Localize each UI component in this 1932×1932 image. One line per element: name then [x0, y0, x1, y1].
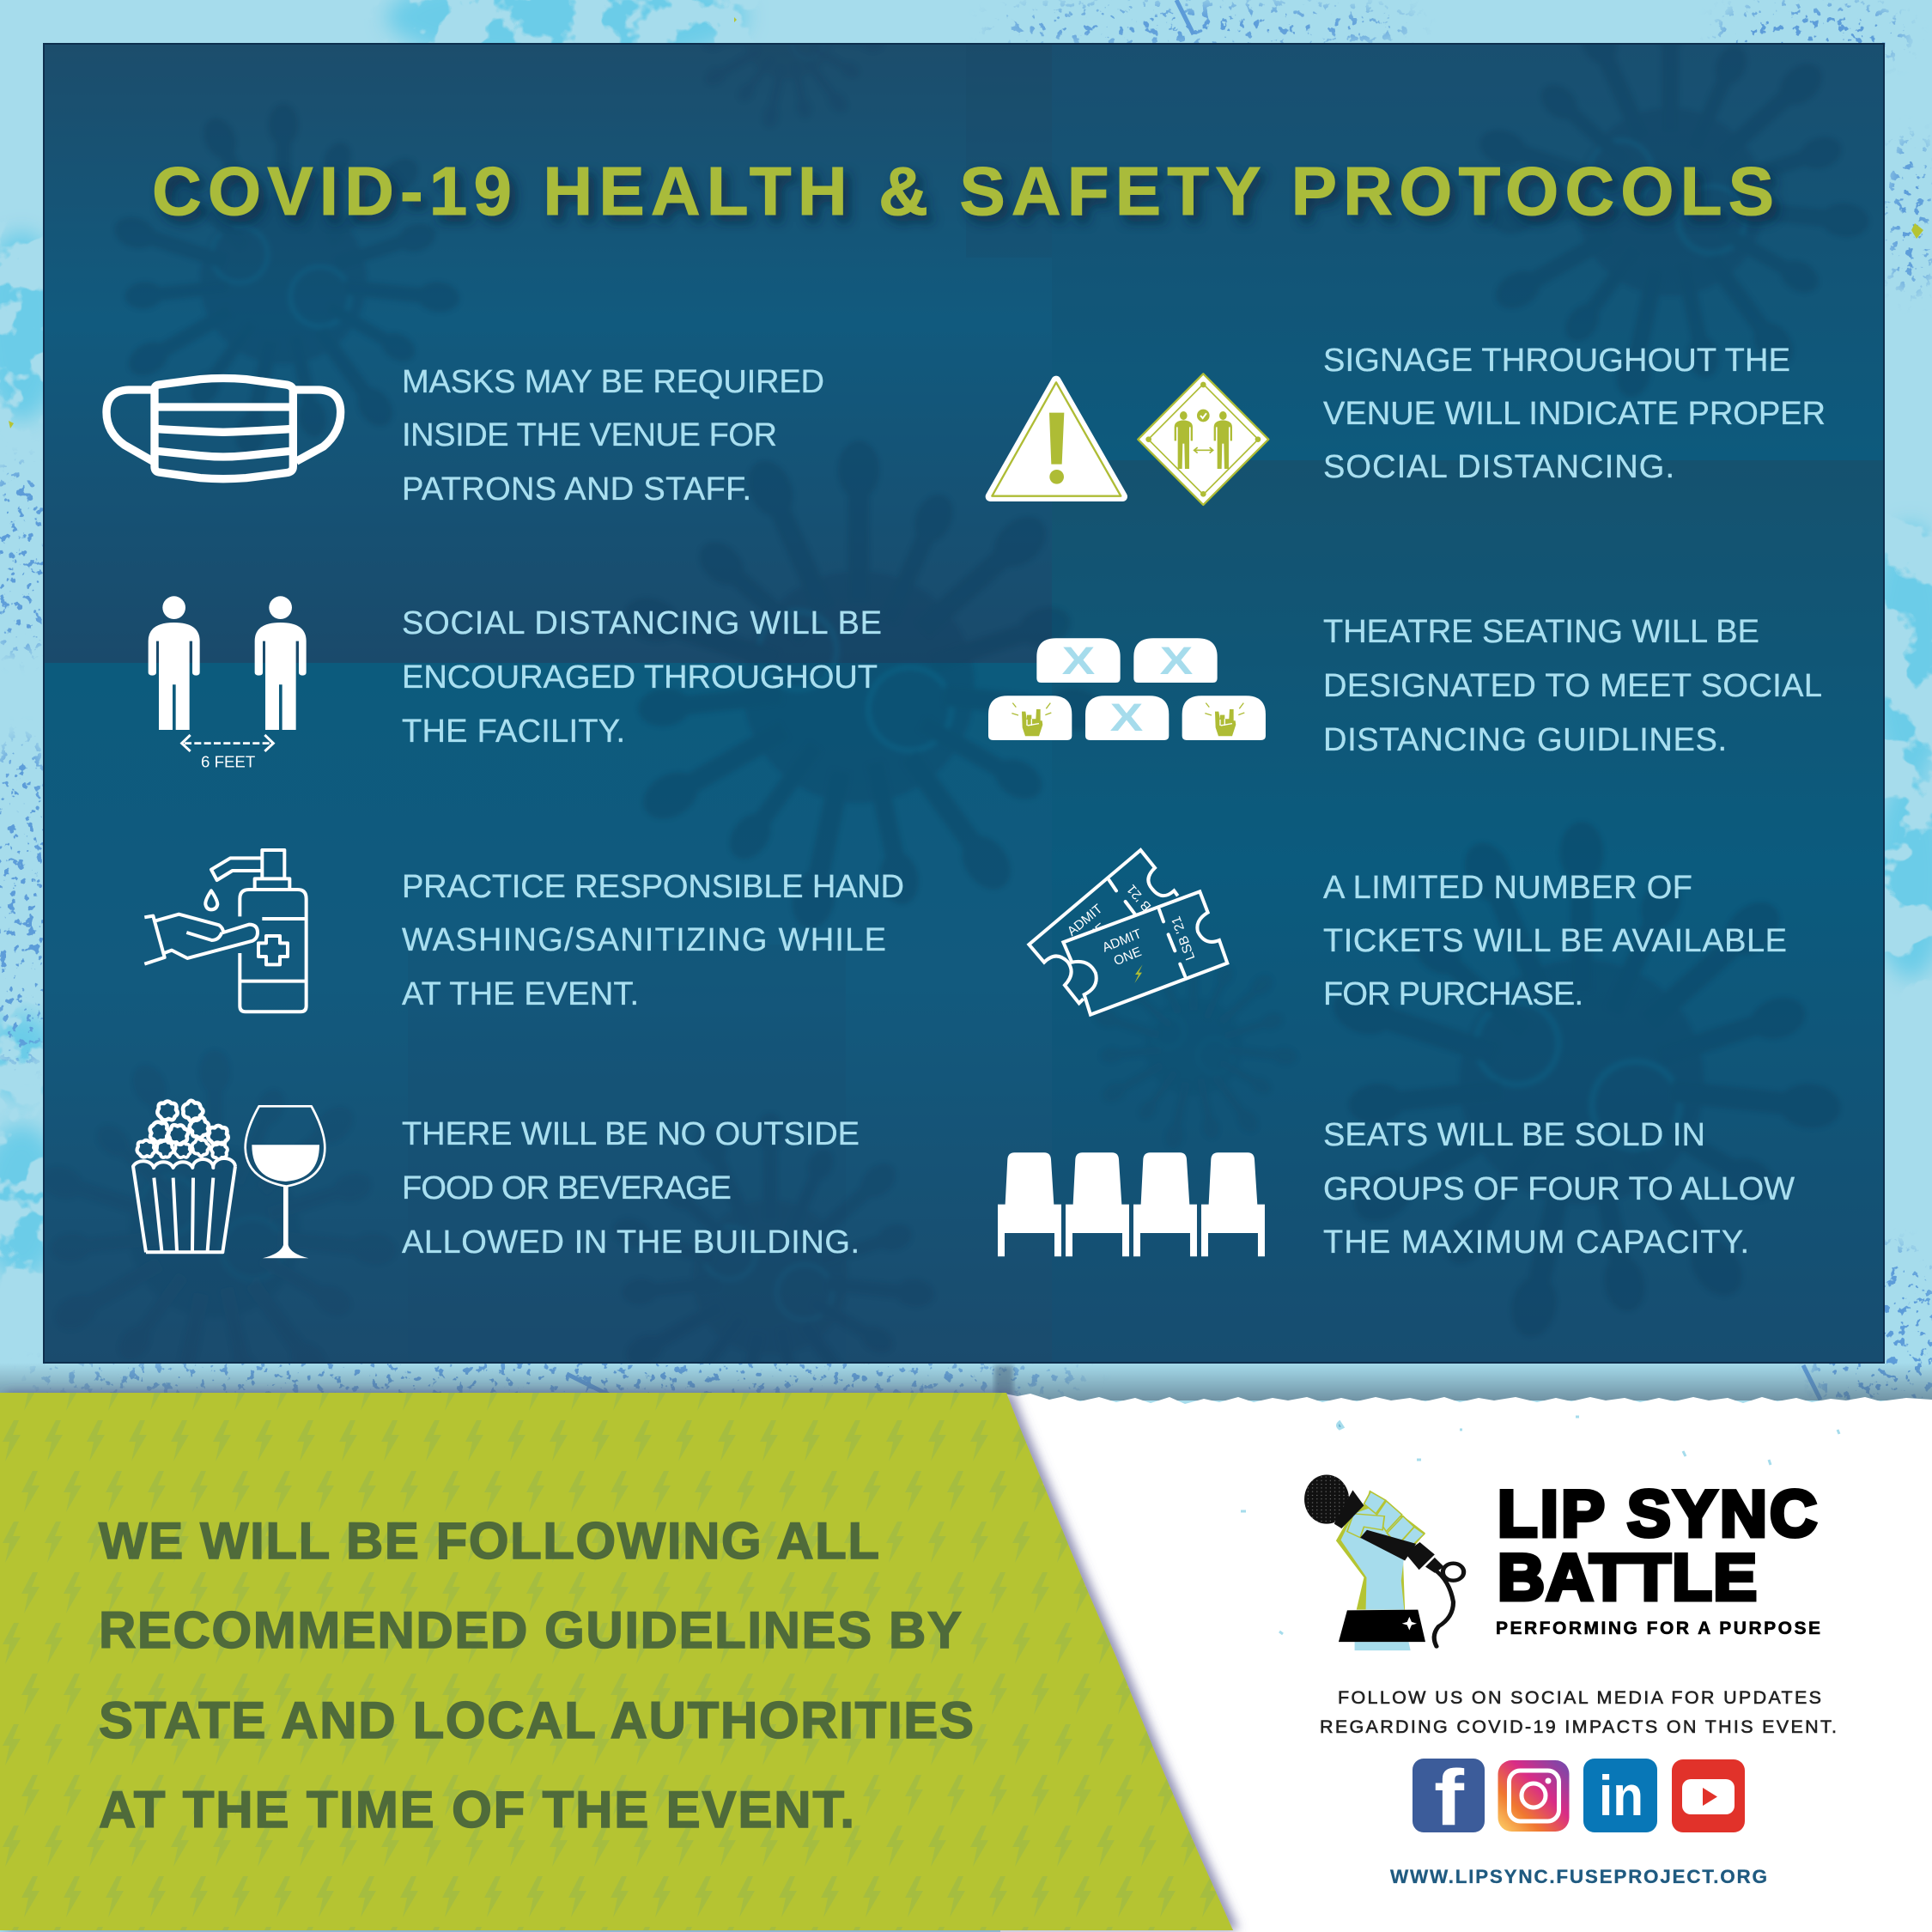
text block: social distancing: ENCOURAGED THROUGHOUT [402, 659, 878, 696]
logo wordmark [1496, 1478, 1820, 1638]
text block: theatre seating [1323, 614, 1822, 758]
icon: admit one tickets: LSB '21 [1124, 882, 1164, 926]
text block: theatre seating: DESIGNATED TO MEET SOCIAL [1323, 668, 1822, 704]
text block: no outside food: THERE WILL BE NO OUTSIDE [402, 1116, 860, 1152]
text block: signage [1323, 343, 1826, 485]
logo wordmark: LIP SYNC [1498, 1478, 1817, 1551]
text block: limited tickets: FOR PURCHASE. [1323, 976, 1583, 1012]
panel: white logo area with torn edge [1000, 1393, 1932, 1932]
icon: admit one tickets: LSB '21 [1169, 914, 1198, 962]
text block: guidelines statement: WE WILL BE FOLLOWING ALL [99, 1512, 879, 1570]
icon: admit one tickets: ONE [1078, 920, 1109, 950]
text block: limited tickets: A LIMITED NUMBER OF [1323, 870, 1692, 906]
text block: hand washing [402, 869, 904, 1012]
text block: theatre seating: THEATRE SEATING WILL BE [1323, 614, 1759, 650]
text block: masks: MASKS MAY BE REQUIRED [402, 364, 824, 400]
icon: two people six feet apart: 6 FEET [201, 752, 255, 770]
text block: social distancing: THE FACILITY. [402, 714, 625, 750]
text block: guidelines statement: RECOMMENDED GUIDELINES BY [99, 1601, 962, 1659]
icon: admit one tickets [1029, 850, 1227, 1015]
icon: lip sync battle fist and microphone logo [1304, 1474, 1464, 1650]
icon: linkedin [1583, 1759, 1657, 1832]
text block: social distancing: SOCIAL DISTANCING WILL BE [402, 605, 882, 641]
text block: masks: PATRONS AND STAFF. [402, 471, 751, 507]
icon: admit one tickets: ADMIT [1100, 927, 1145, 956]
icon: theatre seating chart: X [1160, 639, 1193, 683]
text block: theatre seating: DISTANCING GUIDLINES. [1323, 722, 1727, 758]
panel: dark blue protocols panel [37, 0, 1884, 1442]
text block: seats in groups [1323, 1117, 1795, 1261]
logo wordmark: BATTLE [1498, 1541, 1757, 1614]
icon: youtube [1672, 1759, 1745, 1832]
text block: seats in groups: GROUPS OF FOUR TO ALLOW [1323, 1171, 1795, 1207]
text block: no outside food: ALLOWED IN THE BUILDING. [402, 1224, 860, 1261]
text block: hand washing: AT THE EVENT. [402, 976, 639, 1012]
icon: facebook [1413, 1754, 1485, 1842]
icon: theatre seating chart: X [1110, 696, 1143, 739]
title: COVID-19 HEALTH & SAFETY PROTOCOLS [152, 153, 1774, 229]
icon: four theatre seats [998, 1152, 1265, 1256]
text block: signage: SIGNAGE THROUGHOUT THE [1323, 343, 1790, 379]
icon: admit one tickets: ONE [1112, 945, 1144, 969]
text block: follow us: REGARDING COVID-19 IMPACTS ON THIS EVENT. [1320, 1716, 1837, 1737]
icon: theatre seating chart: X [1062, 639, 1095, 683]
text block: no outside food: FOOD OR BEVERAGE [402, 1170, 732, 1206]
text block: seats in groups: SEATS WILL BE SOLD IN [1323, 1117, 1705, 1153]
text block: guidelines statement [99, 1512, 974, 1838]
text block: limited tickets [1323, 870, 1787, 1012]
text block: hand washing: PRACTICE RESPONSIBLE HAND [402, 869, 904, 905]
text block: masks: INSIDE THE VENUE FOR [402, 417, 777, 453]
icon: popcorn and wine glass [133, 1097, 325, 1258]
panel: green guidelines block [0, 1393, 1233, 1930]
text block: masks [402, 364, 824, 507]
text block: signage: VENUE WILL INDICATE PROPER [1323, 396, 1826, 432]
text block: follow us [1320, 1687, 1837, 1737]
icon: theatre seating chart [988, 638, 1266, 740]
text block: hand washing: WASHING/SANITIZING WHILE [402, 922, 886, 958]
text block: no outside food [402, 1116, 860, 1261]
text block: signage: SOCIAL DISTANCING. [1323, 449, 1674, 485]
text block: social distancing [402, 605, 882, 750]
icon: hand sanitizer [144, 850, 307, 1012]
icon: facebook: f [1434, 1754, 1464, 1842]
icon: face mask [106, 378, 341, 479]
icon: admit one tickets: ADMIT [1065, 902, 1106, 939]
text block: limited tickets: TICKETS WILL BE AVAILABLE [1323, 923, 1787, 959]
text block: guidelines statement: AT THE TIME OF THE EVENT. [99, 1781, 854, 1838]
text block: follow us: FOLLOW US ON SOCIAL MEDIA FOR UPDATES [1338, 1687, 1821, 1708]
text block: seats in groups: THE MAXIMUM CAPACITY. [1323, 1224, 1749, 1261]
icon: instagram [1498, 1760, 1570, 1832]
icon: two people six feet apart [149, 596, 307, 770]
icon: linkedin: in [1599, 1764, 1643, 1827]
icon: warning sign and distancing diamond [990, 374, 1268, 505]
text block: guidelines statement: STATE AND LOCAL AUTHORITIES [99, 1692, 974, 1749]
website url: WWW.LIPSYNC.FUSEPROJECT.ORG [1390, 1866, 1767, 1887]
logo wordmark: PERFORMING FOR A PURPOSE [1496, 1619, 1820, 1638]
